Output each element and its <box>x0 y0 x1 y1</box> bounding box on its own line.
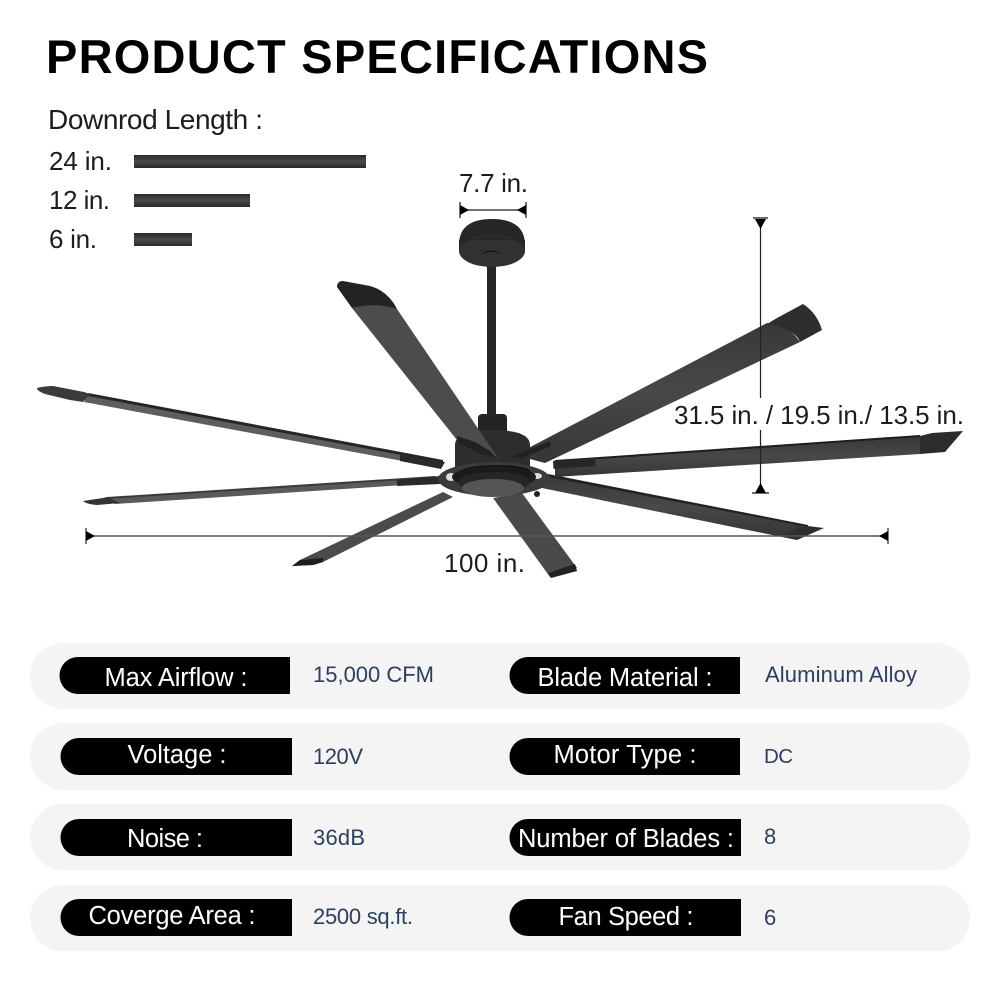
value: area: 2500 sq.ft. <box>313 904 413 929</box>
downrod heading: Downrod Length : <box>48 104 263 135</box>
canopy <box>459 219 525 267</box>
title: PRODUCT SPECIFICATIONS <box>46 30 708 83</box>
dimension: canopy width 7.7 in: 7.7 in. <box>459 168 528 198</box>
downrod 24 in <box>49 146 366 176</box>
screw: lower right bracket <box>534 491 540 497</box>
label: coverage area: Coverge Area : <box>88 902 256 930</box>
label: voltage <box>60 738 292 775</box>
dimension: fan height <box>674 218 964 493</box>
downrod 24 in: 24 in. <box>49 146 112 176</box>
label: motor type <box>510 738 740 775</box>
value: speed: 6 <box>764 905 776 930</box>
dimension: fan diameter 100 in <box>86 528 888 578</box>
downrod 6 in: 6 in. <box>49 224 97 254</box>
value: noise: 36dB <box>313 825 365 850</box>
downrod 6 in <box>49 224 192 254</box>
label: noise: Noise : <box>127 825 203 853</box>
label: number of blades: Number of Blades : <box>518 825 734 853</box>
spec row 4 <box>30 885 970 951</box>
dimension: fan height: 31.5 in. / 19.5 in./ 13.5 in. <box>674 400 964 430</box>
label: fan speed: Fan Speed : <box>558 903 694 931</box>
label: blade material: Blade Material : <box>538 664 712 692</box>
downrod 12 in <box>49 185 250 215</box>
label: motor type: Motor Type : <box>554 741 696 769</box>
dimension: canopy width 7.7 in <box>459 168 528 218</box>
blade: right long <box>553 431 963 477</box>
label: voltage: Voltage : <box>128 741 226 769</box>
blade: left lower thin <box>83 476 440 505</box>
blade: upper left big <box>337 281 498 458</box>
value: voltage: 120V <box>313 744 363 769</box>
value: motor type: DC <box>764 745 793 768</box>
blade: upper right big <box>515 304 822 463</box>
blade: left upper thin <box>37 386 445 469</box>
value: blade material: Aluminum Alloy <box>765 662 917 687</box>
label: max airflow: Max Airflow : <box>104 664 248 692</box>
downrod length legend <box>48 104 366 254</box>
spec row 2 <box>30 723 970 790</box>
label: fan speed <box>510 899 741 936</box>
motor housing <box>455 414 530 470</box>
blade: lower left thin back <box>292 492 453 566</box>
spec row 3 <box>30 804 970 870</box>
fan hub ring <box>438 462 550 497</box>
label: blade material <box>510 657 740 694</box>
label: coverage area <box>60 899 292 936</box>
downrod <box>487 255 496 417</box>
label: max airflow <box>59 657 290 694</box>
blade: lower right long <box>537 474 824 540</box>
label: noise <box>60 819 292 856</box>
bracket: upper right blade <box>510 441 551 458</box>
ceiling fan illustration <box>37 219 963 578</box>
dimension: fan diameter 100 in: 100 in. <box>444 548 525 578</box>
value: blades: 8 <box>764 824 776 849</box>
value: airflow: 15,000 CFM <box>313 662 434 687</box>
downrod 12 in: 12 in. <box>49 185 110 215</box>
blade: lower right front <box>493 493 577 578</box>
spec row 1 <box>30 643 970 709</box>
